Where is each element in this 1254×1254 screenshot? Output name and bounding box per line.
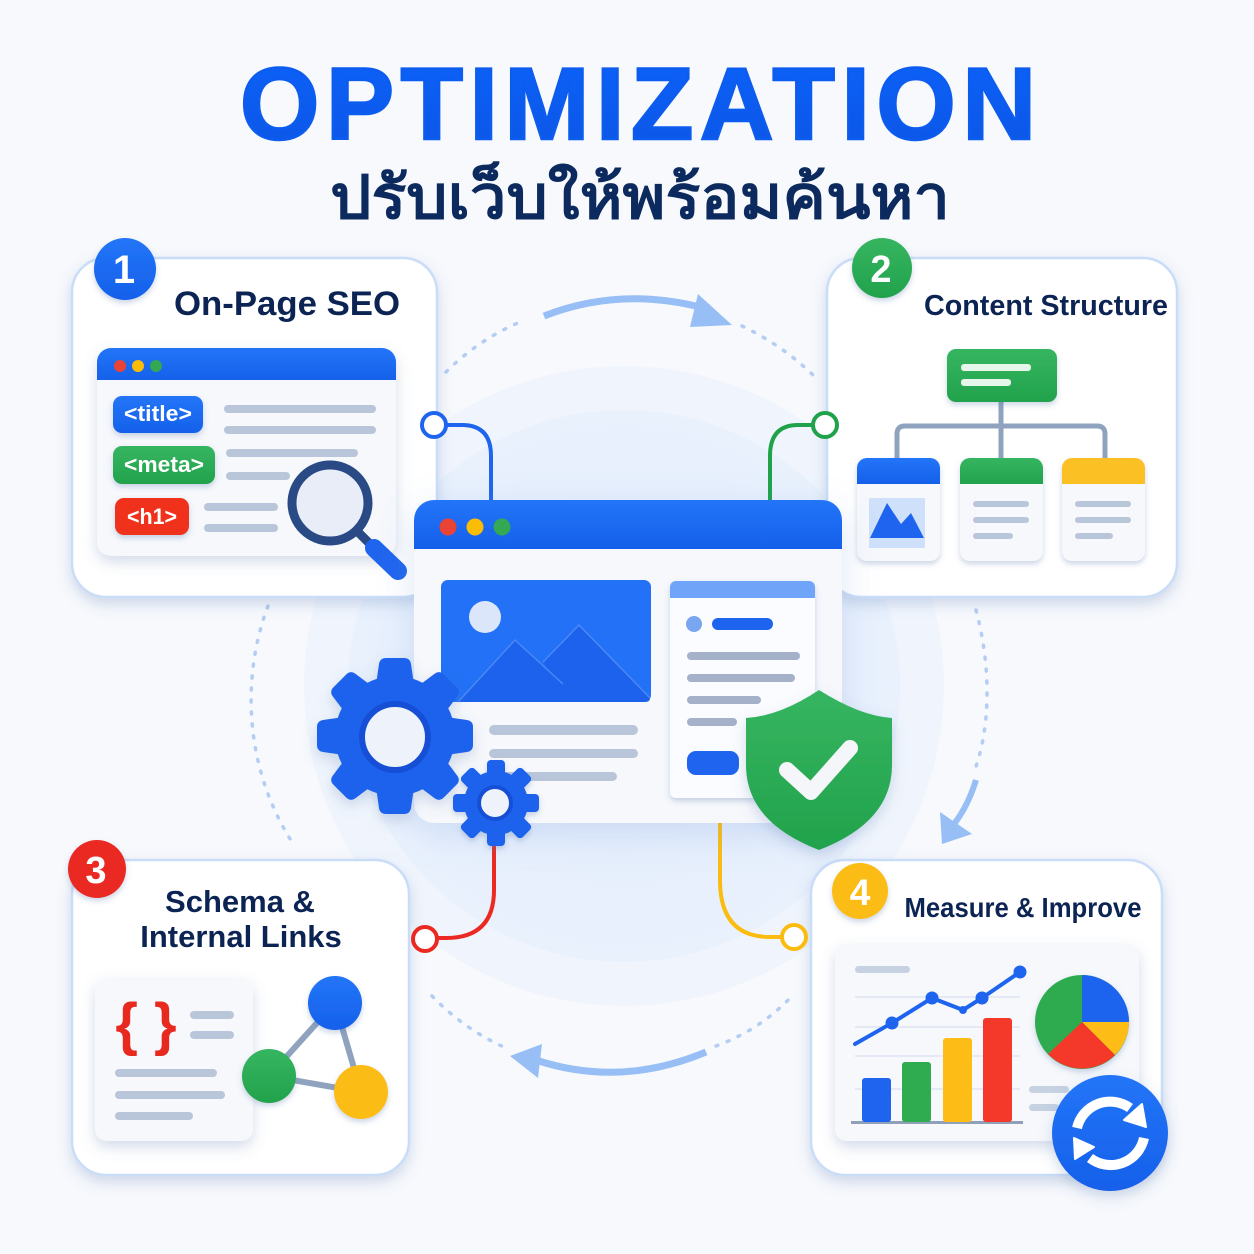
heading: Measure & Improve bbox=[904, 892, 1142, 923]
connector tree bbox=[897, 400, 1105, 458]
heading: On-Page SEO bbox=[174, 285, 400, 323]
image placeholder bbox=[441, 580, 651, 702]
code card: { } bbox=[115, 992, 177, 1057]
heading: Content Structure bbox=[924, 290, 1168, 322]
dashboard card bbox=[835, 944, 1139, 1141]
title: OPTIMIZATION bbox=[240, 47, 1036, 161]
icon: large gear bbox=[317, 658, 473, 814]
arrow: bottom cycle bbox=[510, 1044, 706, 1078]
connector: yellow bbox=[720, 822, 806, 949]
icon: shield with check bbox=[746, 690, 892, 850]
icon: magnifier bbox=[292, 465, 398, 571]
central halo circles bbox=[304, 366, 944, 1006]
connector: red bbox=[413, 840, 494, 951]
text lines bbox=[489, 725, 638, 781]
browser mockup bbox=[97, 348, 396, 556]
dotted cycle ring and arrows bbox=[251, 294, 987, 1078]
badge 1: 1 bbox=[113, 248, 135, 292]
panel: Schema & Internal Links bbox=[72, 860, 409, 1175]
card: yellow bbox=[1062, 458, 1145, 561]
central browser window bbox=[414, 500, 842, 823]
icon: refresh bbox=[1052, 1075, 1168, 1191]
card: green bbox=[960, 458, 1043, 561]
connector: green bbox=[770, 413, 837, 502]
icon: small gear bbox=[453, 760, 539, 846]
code card bbox=[95, 978, 253, 1141]
tag: meta bbox=[113, 446, 215, 484]
arrow: top cycle bbox=[544, 294, 732, 327]
subtitle in Thai: ปรับเว็บให้พร้อมค้นหา bbox=[330, 161, 950, 231]
arrow: right cycle bbox=[940, 780, 976, 844]
heading: Internal Links bbox=[140, 919, 342, 954]
sidebar card bbox=[670, 581, 815, 798]
badge 1 bbox=[94, 238, 156, 300]
tag: h1 bbox=[115, 498, 189, 535]
panel: Content Structure bbox=[827, 258, 1177, 597]
badge 2 bbox=[852, 238, 912, 298]
root node bbox=[947, 349, 1057, 402]
badge 4 bbox=[832, 863, 888, 919]
badge 3 bbox=[68, 840, 126, 898]
card: image bbox=[857, 458, 940, 561]
pie chart bbox=[1035, 975, 1129, 1069]
tag: h1: <h1> bbox=[127, 504, 177, 529]
bar chart bbox=[851, 1018, 1023, 1124]
badge 4: 4 bbox=[850, 872, 871, 913]
heading: Schema & bbox=[165, 884, 315, 919]
line chart bbox=[855, 966, 1026, 1044]
tag: meta: <meta> bbox=[124, 452, 204, 477]
badge 3: 3 bbox=[85, 850, 107, 892]
connector: blue bbox=[422, 413, 491, 502]
badge 2: 2 bbox=[870, 249, 892, 291]
panel: Measure & Improve bbox=[811, 860, 1168, 1191]
tag: title bbox=[113, 396, 203, 433]
tag: title: <title> bbox=[124, 401, 192, 426]
network graph bbox=[242, 976, 388, 1119]
panel: On-Page SEO bbox=[72, 258, 437, 597]
